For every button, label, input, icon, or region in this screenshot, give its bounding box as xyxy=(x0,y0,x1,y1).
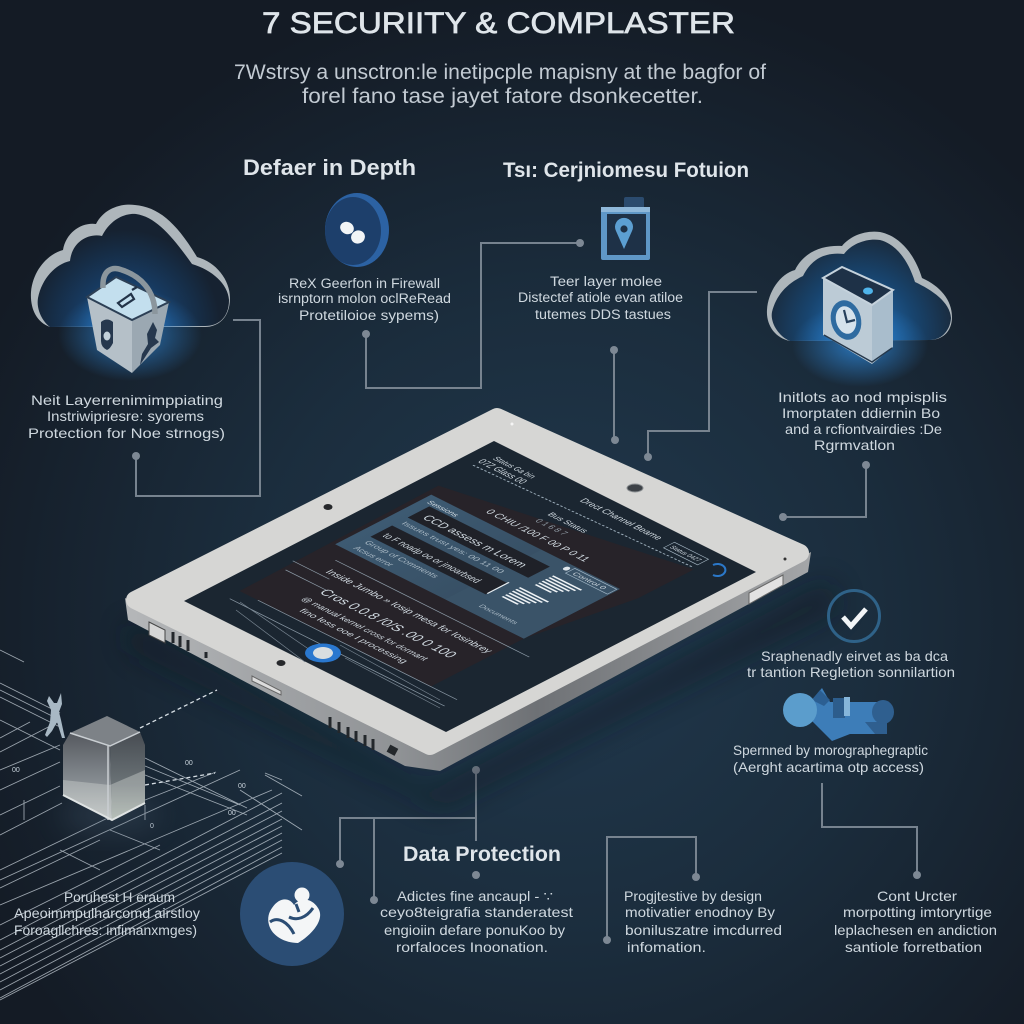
icon: right cloud with server box xyxy=(767,232,952,387)
tablet screen: Bus Status xyxy=(545,511,590,534)
icon: home button xyxy=(236,602,440,708)
text: regulation xyxy=(747,648,955,680)
tablet screen: Status 0427 xyxy=(667,545,703,563)
text: next layer xyxy=(28,392,225,441)
tablet bezel xyxy=(135,417,800,746)
tablet screen: 07Z Glass 00 xyxy=(474,458,529,486)
tablet screen: fino less ooe I processing xyxy=(297,607,411,665)
tablet screen: Drect Channel Beame xyxy=(577,497,665,541)
tablet screen: 0 1 6 8 7 xyxy=(533,518,571,537)
text: regulation: Sraphenadly eirvet as ba dca xyxy=(761,648,948,664)
subtitle: 7Wstrsy a unsctron:le inetipcple mapisny at the bagfor of xyxy=(234,61,766,84)
isometric wireframe lines xyxy=(0,650,302,1000)
text: progressive by design xyxy=(624,888,782,955)
text: encryption access: Spernned by morographegraptic xyxy=(733,742,928,758)
text: firewall layer: isrnptorn molon oclReRead xyxy=(278,291,451,306)
text: cont unit: morpotting imtoryrtige xyxy=(843,904,992,920)
tablet screen xyxy=(184,441,756,732)
icon: glass cube xyxy=(60,716,160,833)
text: data protection body xyxy=(380,888,573,955)
bezel details xyxy=(149,422,786,756)
text: firewall layer: Protetiloioe sypems) xyxy=(299,308,439,323)
text: progressive by design: motivatier enodnoy By xyxy=(625,904,775,920)
text: progressive by design: Progjtestive by design xyxy=(624,888,762,904)
wireframe labels: 00 xyxy=(185,760,193,767)
text: tier layer: Teer layer molee xyxy=(550,274,662,289)
text: firewall layer: ReX Geerfon in Firewall xyxy=(289,276,440,291)
text: encryption access: (Aerght acartima otp access) xyxy=(733,759,924,775)
subtitle: forel fano tase jayet fatore dsonkecetter. xyxy=(302,85,703,108)
wireframe dashed line xyxy=(140,690,217,785)
text: cont unit: santiole forretbation xyxy=(845,939,982,955)
text: data protection body: engioiin defare ponuKoo by xyxy=(384,922,565,938)
icon: check circle xyxy=(828,590,880,642)
text: bottom left: Apeoimmpulharcomd airstloy xyxy=(14,906,200,921)
text: initiates: Rgrmvatlon xyxy=(814,437,895,453)
icon: chat circle xyxy=(325,193,389,267)
tablet screen: 0 CHIU /100 F 00 P 0 11 xyxy=(482,508,592,563)
icon: blue key shapes xyxy=(783,688,894,741)
subtitle xyxy=(234,61,766,108)
heading: defense in depth: Defaer in Depth xyxy=(243,155,416,180)
tablet screen: Group of Comments xyxy=(362,539,441,579)
heading: data protection: Data Protection xyxy=(403,843,561,866)
text: initiates: Imorptaten ddiernin Bo xyxy=(782,405,940,421)
title: 7 SECURIITY & COMPLASTER xyxy=(262,7,735,40)
text: tier layer: tutemes DDS tastues xyxy=(535,307,671,322)
connector lines xyxy=(132,239,921,944)
tablet screen: Sessions xyxy=(424,500,461,518)
text: bottom left: Foroagllchres: infimanxmges) xyxy=(14,923,197,938)
text: initiates xyxy=(778,389,947,453)
tablet xyxy=(125,417,840,810)
text: tier layer: Distectef atiole evan atiloe xyxy=(518,290,683,305)
wireframe labels: 00 xyxy=(238,783,246,790)
heading: tsi solution: Tsı: Cerjniomesu Fotuion xyxy=(503,159,749,182)
text: next layer: Protection for Noe strnogs) xyxy=(28,425,225,441)
tablet screen: CCD assess m Lorem xyxy=(419,514,530,570)
icon: document with pin xyxy=(601,197,650,260)
wireframe labels: 00 xyxy=(12,767,20,774)
icon: standing figure xyxy=(45,693,65,738)
icon: left cloud with lock box xyxy=(31,205,230,381)
tablet screen: Acsus error xyxy=(351,545,397,568)
text: data protection body: rorfaloces Inoonation. xyxy=(396,939,548,955)
text: next layer: Neit Layerrenimimppiating xyxy=(31,392,223,408)
text: cont unit xyxy=(834,888,997,955)
tablet screen: Control 0 xyxy=(570,572,608,591)
text: tier layer xyxy=(518,274,683,322)
tablet screen: to F noadp oo or jmoarbsed xyxy=(379,532,484,585)
wireframe labels xyxy=(12,760,246,830)
wireframe labels: 00 xyxy=(228,810,236,817)
text: data protection body: Adictes fine ancaupl - ∵ xyxy=(397,888,553,904)
text: initiates: Initlots ao nod mpisplis xyxy=(778,389,947,405)
text: cont unit: Cont Urcter xyxy=(877,888,957,904)
text: progressive by design: boniluszatre imcdurred xyxy=(625,922,782,938)
icon: care circle xyxy=(240,862,344,966)
tablet screen: Cros 0.0.8 /0/S .00 0 100 xyxy=(316,587,461,660)
text: initiates: and a rcfiontvairdies :De xyxy=(785,421,942,437)
text: data protection body: ceyo8teigrafia standeratest xyxy=(380,904,573,920)
tablet screen: Issues trust yes: 00 11 00 xyxy=(399,521,506,574)
text: bottom left: Poruhest H eraum xyxy=(64,890,175,905)
text: encryption access xyxy=(733,742,928,775)
text: next layer: Instriwipriesre: syorems xyxy=(47,408,204,424)
text: progressive by design: infomation. xyxy=(627,939,706,955)
wireframe labels: 0 xyxy=(150,823,154,830)
tablet side edge xyxy=(125,552,811,771)
tablet screen: Inside Jumbo » Iosip mesa for Iosinbrey xyxy=(322,568,495,655)
text: cont unit: leplachesen en andiction xyxy=(834,922,997,938)
text: regulation: tr tantion Regletion sonnilartion xyxy=(747,664,955,680)
tablet screen: Documents xyxy=(476,604,520,626)
text: firewall layer xyxy=(278,276,451,323)
tablet screen: @ manual kernel cross for dormant xyxy=(299,595,432,662)
text: bottom left xyxy=(14,890,200,938)
tablet screen: Status Ga bin xyxy=(490,456,538,480)
